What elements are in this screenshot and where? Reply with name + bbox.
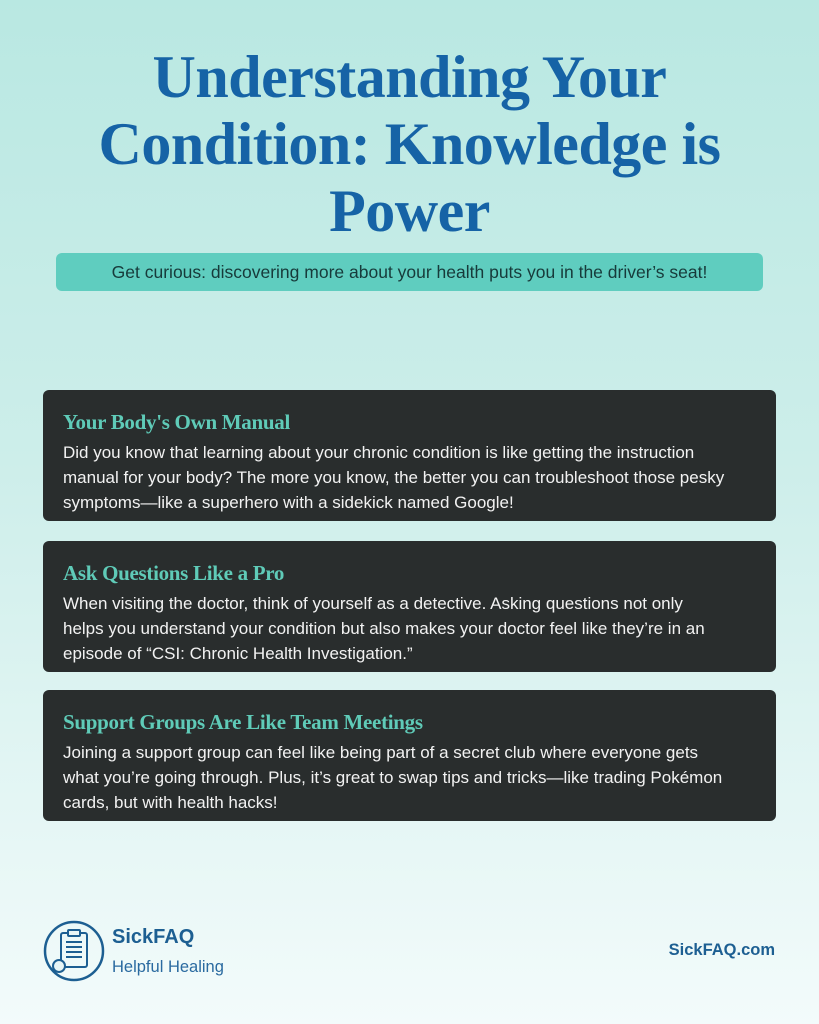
tagline: Helpful Healing (112, 958, 224, 976)
heading: Your Body's Own Manual (63, 410, 290, 434)
text: Joining a support group can feel like being part of a secret club where everyone gets what you’re going through. Plus, it’s great to swap tips and tricks—like trading Pokémon cards, but with health hacks! (63, 743, 722, 812)
brand name: SickFAQ (112, 926, 194, 948)
title (99, 44, 720, 244)
footer logo (44, 920, 224, 982)
heading: Ask Questions Like a Pro (63, 561, 284, 585)
panel: support groups (43, 690, 776, 821)
heading: Support Groups Are Like Team Meetings (63, 710, 423, 734)
panel: body manual (43, 390, 776, 521)
title: Power (329, 178, 490, 244)
subtitle banner (56, 253, 763, 291)
website url: SickFAQ.com (669, 941, 775, 959)
icon: clipboard (44, 920, 104, 982)
title: Understanding Your (153, 44, 666, 110)
text: When visiting the doctor, think of yourself as a detective. Asking questions not only helps you understand your condition but also makes your doctor feel like they’re in an episode of “CSI: Chronic Health Investigation.” (63, 594, 705, 663)
text: Did you know that learning about your chronic condition is like getting the instruction manual for your body? The more you know, the better you can troubleshoot those pesky symptoms—like a superhero with a sidekick named Google! (63, 443, 724, 512)
subtitle banner: Get curious: discovering more about your health puts you in the driver’s seat! (112, 262, 707, 282)
panel: ask questions (43, 541, 776, 672)
title: Condition: Knowledge is (99, 111, 720, 177)
